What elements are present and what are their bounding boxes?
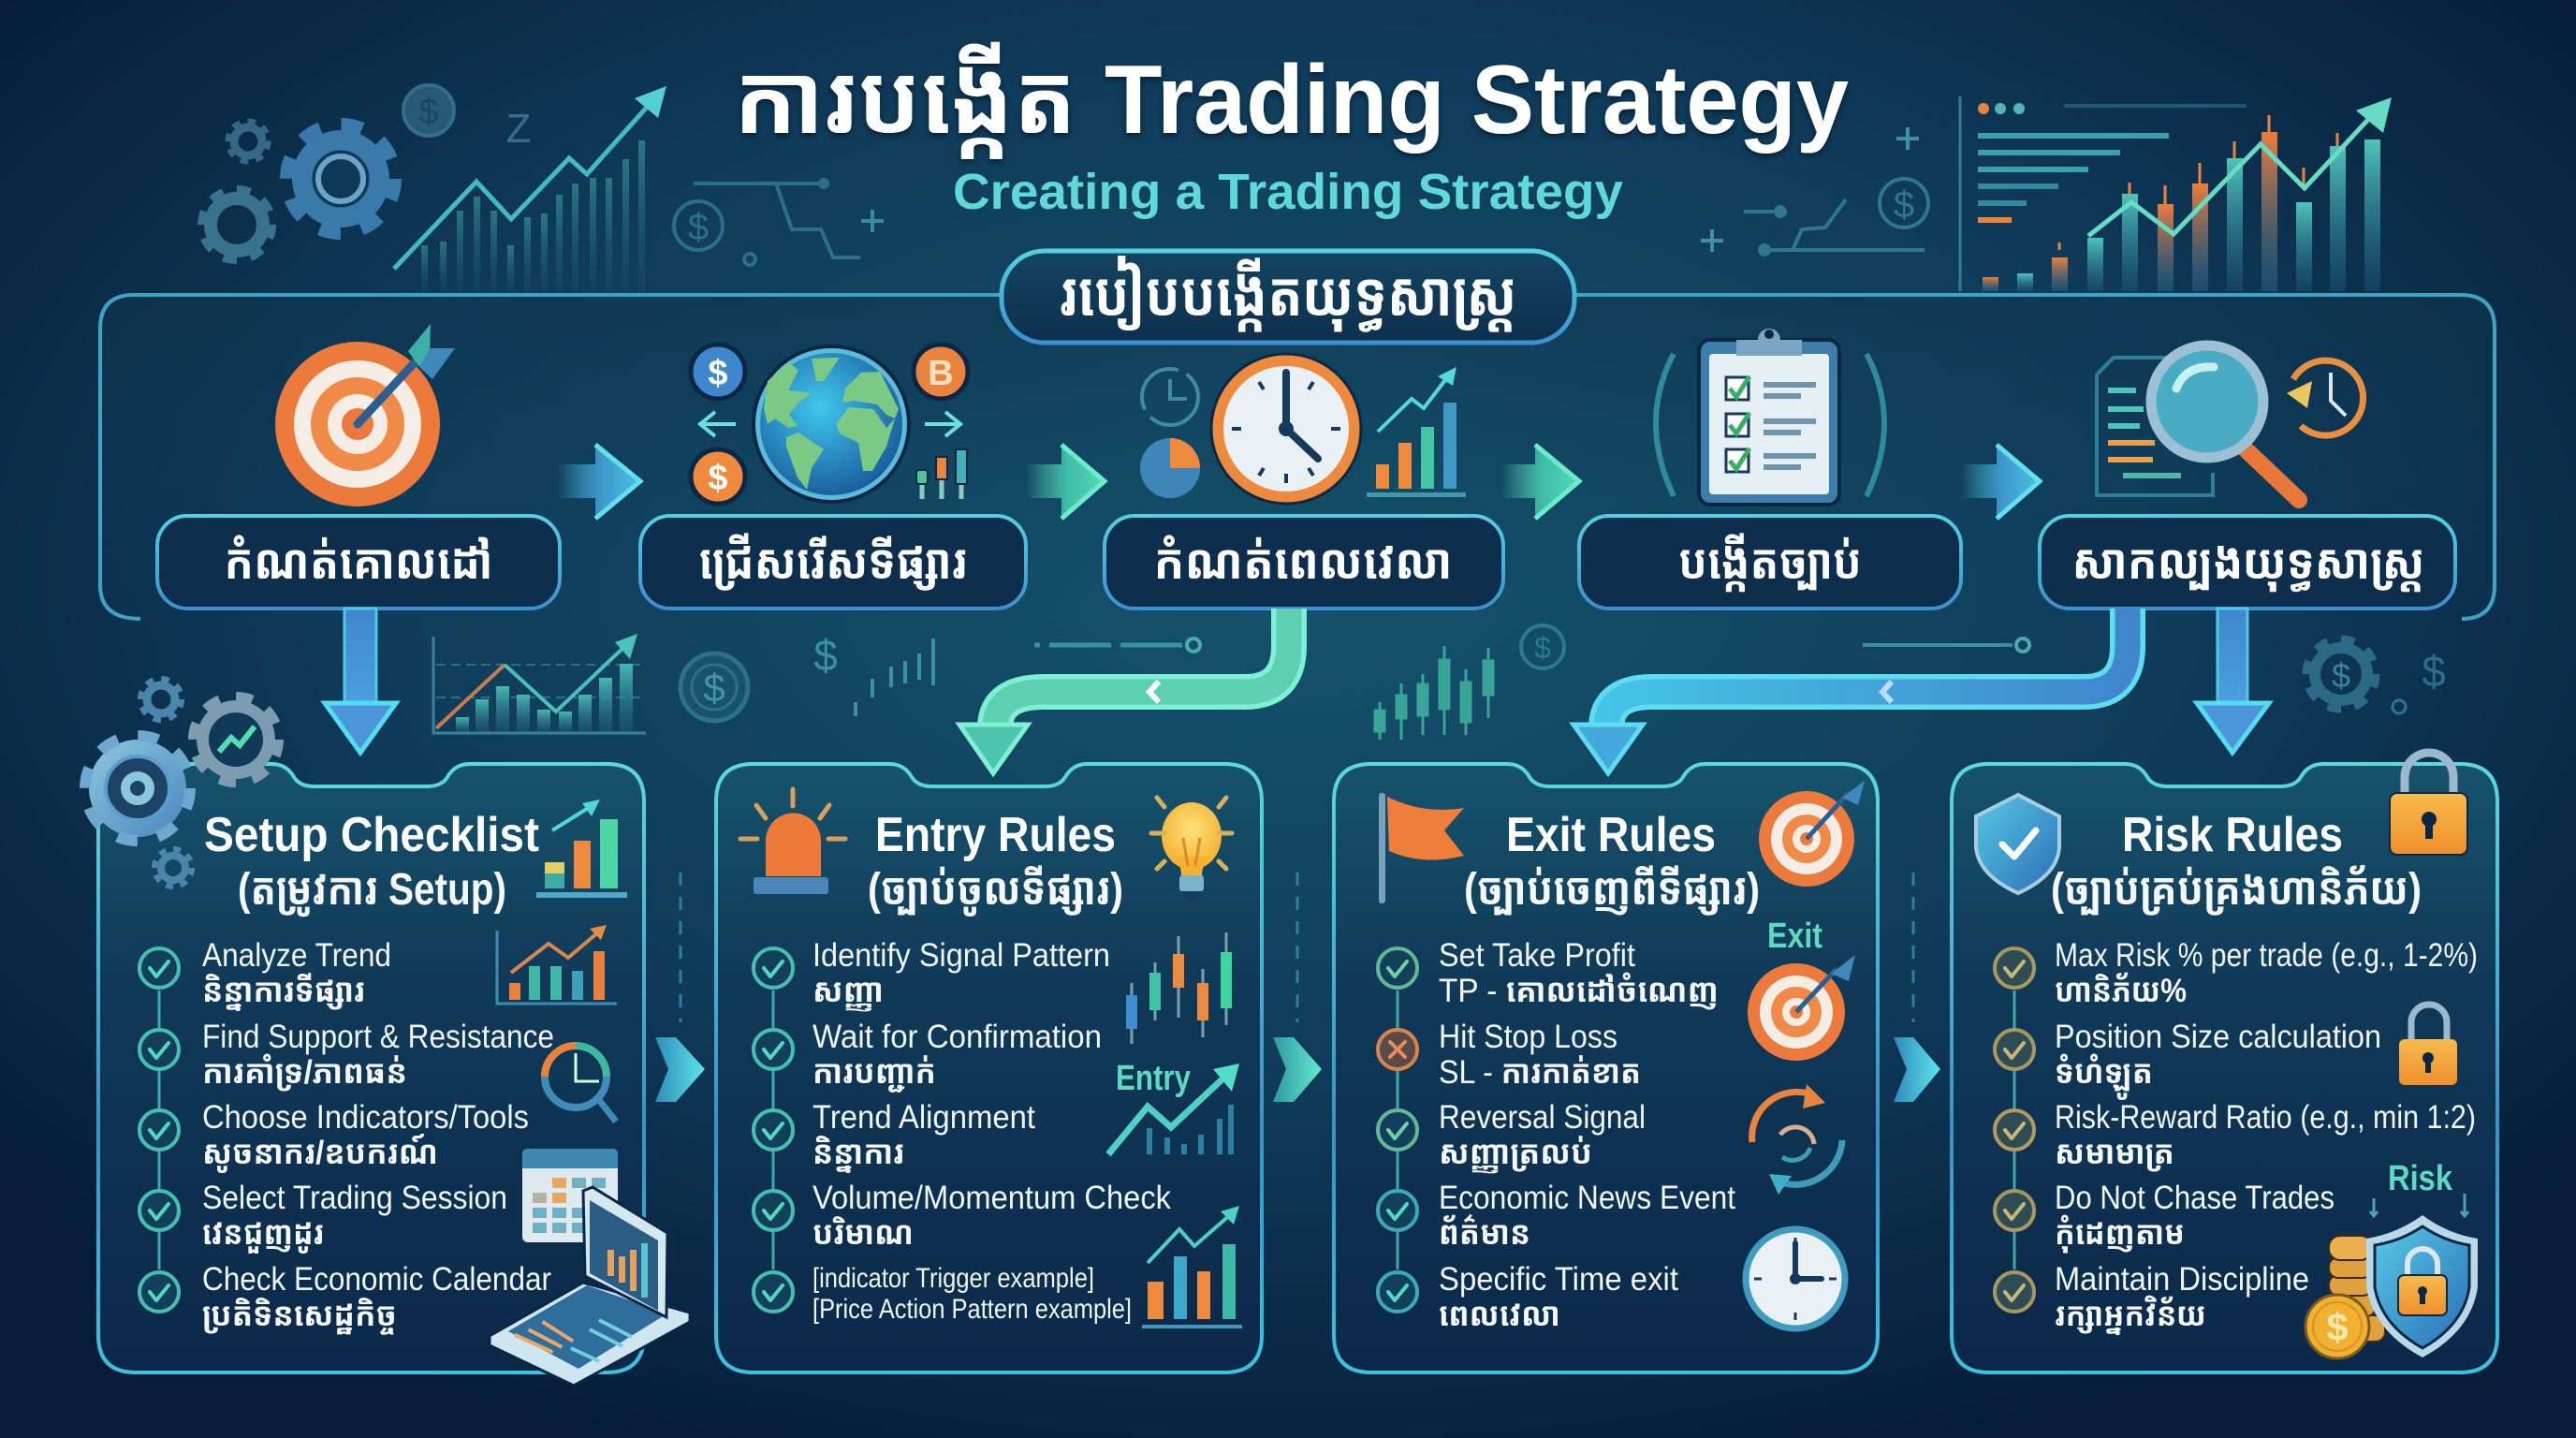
item: reversal: សញ្ញាត្រលប់ bbox=[1439, 1135, 1592, 1174]
arrow: step 3 to 4 bbox=[1501, 445, 1579, 519]
card subheading: (ច្បាប់ចូលទីផ្សារ) bbox=[868, 864, 1123, 917]
card subheading: (ច្បាប់គ្រប់គ្រងហានិភ័យ) bbox=[2051, 864, 2422, 916]
decoration: top-left gears and growth chart bbox=[202, 85, 884, 292]
icon: dollar gear bbox=[2306, 639, 2376, 709]
icon: tablet and laptop bbox=[490, 1187, 690, 1386]
icon: shield bbox=[1976, 795, 2059, 893]
item: calendar bbox=[139, 1261, 551, 1335]
item: confirmation: ការបញ្ជាក់ bbox=[812, 1054, 936, 1093]
subtitle: Creating a Trading Strategy bbox=[953, 164, 1623, 220]
item: session bbox=[139, 1180, 507, 1254]
icon: large gear bbox=[85, 736, 190, 841]
decoration: middle-right candles and coins bbox=[1374, 625, 2446, 740]
step label: choose market bbox=[640, 516, 1026, 609]
panel: risk rules bbox=[1952, 753, 2497, 1372]
item: indicators bbox=[139, 1099, 529, 1173]
item: news: ព័ត៌មាន bbox=[1439, 1212, 1530, 1252]
item: confirmation bbox=[754, 1019, 1102, 1093]
item: signal pattern: សញ្ញា bbox=[812, 973, 884, 1012]
panel: exit rules bbox=[1334, 764, 1878, 1372]
card frame bbox=[1952, 764, 2497, 1372]
icon: magnifier over document bbox=[2097, 345, 2364, 500]
item: do not chase bbox=[1995, 1180, 2334, 1254]
arrow: exit to risk bbox=[1894, 1037, 1940, 1102]
icon: gold coin: $ bbox=[2326, 1305, 2349, 1349]
icon: small gear bbox=[228, 122, 268, 161]
item: signal pattern bbox=[754, 937, 1110, 1012]
checklist rail bbox=[2012, 990, 2016, 1269]
item: confirmation: Wait for Confirmation bbox=[812, 1019, 1102, 1055]
icon: large gear bbox=[286, 125, 395, 233]
item: max risk bbox=[1995, 937, 2478, 1009]
item: trend alignment: និន្នាការ bbox=[812, 1134, 904, 1174]
item: discipline: Maintain Discipline bbox=[2055, 1261, 2309, 1298]
item: session: Select Trading Session bbox=[202, 1180, 507, 1216]
item: discipline: រក្សាអ្នកវិន័យ bbox=[2055, 1296, 2206, 1336]
item: analyze trend: និន្នាការទីផ្សារ bbox=[202, 972, 365, 1012]
icon: dollar gear: $ bbox=[2332, 656, 2350, 695]
checklist rail bbox=[157, 990, 161, 1269]
decoration: middle-left mini chart bbox=[433, 631, 1200, 733]
dashboard lines bbox=[1960, 96, 2247, 291]
item: risk reward bbox=[1995, 1099, 2476, 1172]
icon: clock bbox=[1746, 1229, 1845, 1328]
connector dashes between cards bbox=[681, 873, 1913, 1022]
icon: coin: $ bbox=[1534, 631, 1551, 665]
item: signal pattern: Identify Signal Pattern bbox=[812, 937, 1110, 974]
decoration: top-right dashboard chart bbox=[1701, 96, 2392, 291]
panel: entry rules bbox=[716, 764, 1262, 1372]
decoration: coin and circuit bbox=[674, 180, 884, 265]
panel: strategy process bbox=[100, 251, 2495, 619]
icon: trend chart bbox=[497, 925, 617, 1004]
panel: setup checklist bbox=[85, 679, 690, 1386]
arrow: test strategy to risk rules bbox=[2197, 609, 2269, 753]
icon: calendar bbox=[522, 1149, 618, 1242]
icon: gear with trend bbox=[193, 697, 279, 783]
item: indicators: Choose Indicators/Tools bbox=[202, 1099, 529, 1136]
step label: define goal bbox=[157, 516, 560, 609]
tag: exit: Exit bbox=[1767, 917, 1822, 956]
icon: dollar coin bbox=[403, 85, 454, 136]
icon: candlesticks bbox=[1126, 932, 1232, 1044]
small dollar: $ bbox=[813, 631, 838, 680]
item: position size: Position Size calculation bbox=[2055, 1019, 2381, 1055]
item: analyze trend: Analyze Trend bbox=[202, 937, 391, 974]
letter mark: Z bbox=[506, 106, 531, 152]
arrow: rising trend bbox=[394, 86, 666, 269]
arrow: test strategy to exit rules bbox=[1573, 609, 2128, 773]
arrow: entry to exit bbox=[1273, 1037, 1322, 1102]
item: stop loss: SL - ការកាត់ខាត bbox=[1439, 1054, 1641, 1091]
step label: create rules bbox=[1579, 516, 1961, 609]
small ring bbox=[2393, 700, 2406, 713]
icon: gold coin bbox=[2305, 1295, 2369, 1358]
small bars bbox=[854, 638, 935, 716]
icon: small gear bbox=[154, 849, 192, 887]
panel frame bbox=[100, 295, 2495, 619]
item: discipline bbox=[1995, 1261, 2309, 1336]
item: take profit: TP - គោលដៅចំណេញ bbox=[1439, 971, 1719, 1010]
step label: define goal: កំណត់គោលដៅ bbox=[225, 535, 492, 590]
heading pill: របៀបបង្កើតយុទ្ធសាស្ត្រ bbox=[1060, 256, 1516, 333]
item: position size: ទំហំឡូត bbox=[2055, 1052, 2153, 1100]
item: time exit: ពេលវេលា bbox=[1439, 1297, 1560, 1333]
icon: dollar coin: $ bbox=[418, 93, 439, 132]
heading pill bbox=[1002, 251, 1574, 343]
arrow: step 2 to 3 bbox=[1026, 445, 1105, 519]
item: stop loss bbox=[1378, 1019, 1641, 1091]
card subheading: (តម្រូវការ Setup) bbox=[238, 865, 506, 917]
item: volume momentum bbox=[754, 1180, 1171, 1252]
title: English part: Trading Strategy bbox=[1105, 46, 1849, 154]
icon: clock with pie and bars bbox=[1140, 354, 1466, 504]
item: risk reward: សមាមាត្រ bbox=[2055, 1135, 2174, 1172]
icon: dollar coin bbox=[681, 653, 748, 721]
item: take profit bbox=[1378, 937, 1719, 1010]
icon: checklist clipboard bbox=[1656, 329, 1884, 505]
checklist bbox=[139, 937, 554, 1335]
tag: entry: Entry bbox=[1116, 1059, 1191, 1098]
item: trigger examples bbox=[754, 1263, 1132, 1325]
item: time exit bbox=[1378, 1261, 1678, 1333]
checklist rail bbox=[1397, 990, 1398, 1269]
icon: bar chart bbox=[536, 800, 627, 898]
tag: risk: Risk bbox=[2388, 1159, 2453, 1198]
item: time exit: Specific Time exit bbox=[1439, 1261, 1678, 1298]
card heading: Setup Checklist bbox=[204, 808, 539, 862]
icon: target middle bbox=[1748, 955, 1855, 1061]
decoration: coin and circuit: $ bbox=[1894, 184, 1914, 226]
icon: small down arrows bbox=[2370, 1194, 2468, 1216]
icon: clock magnifier bbox=[545, 1046, 616, 1122]
step label: test strategy bbox=[2040, 516, 2455, 609]
icon: small gear top bbox=[140, 679, 182, 720]
item: analyze trend bbox=[139, 937, 391, 1012]
icon: reversal arrows bbox=[1752, 1084, 1842, 1195]
circuit line bbox=[1863, 638, 2029, 652]
decoration: coin and circuit: $ bbox=[688, 207, 709, 248]
fading bars bbox=[421, 140, 645, 292]
item: calendar: ប្រតិទិនសេដ្ឋកិច្ច bbox=[202, 1296, 397, 1335]
icon: dollar coin: $ bbox=[703, 666, 725, 710]
icon: bottom bar chart bbox=[1142, 1206, 1242, 1328]
panel top highlight bbox=[655, 292, 1919, 298]
item: max risk: ហានិភ័យ% bbox=[2055, 972, 2187, 1009]
title: Khmer part: ការបង្កើត bbox=[734, 41, 1076, 160]
item: session: វេនជួញដូរ bbox=[202, 1215, 324, 1254]
step label: define timeframe bbox=[1105, 516, 1503, 609]
item: trend alignment: Trend Alignment bbox=[812, 1099, 1035, 1136]
item: reversal bbox=[1378, 1099, 1646, 1174]
decoration: coin and circuit bbox=[1701, 127, 1928, 255]
icon: target top bbox=[1759, 781, 1865, 887]
icon: alarm light bbox=[740, 789, 845, 894]
item: trigger examples: [Price Action Pattern example] bbox=[812, 1294, 1132, 1325]
item: calendar: Check Economic Calendar bbox=[202, 1261, 551, 1298]
checklist bbox=[754, 937, 1171, 1325]
checklist rail bbox=[771, 990, 775, 1269]
item: support and resistance bbox=[139, 1019, 554, 1092]
circuit line bbox=[1034, 638, 1200, 652]
icon: shield with lock bbox=[2366, 1215, 2478, 1357]
card heading: Entry Rules bbox=[875, 808, 1116, 862]
item: position size bbox=[1995, 1019, 2381, 1100]
icon: coin stack bbox=[2329, 1236, 2385, 1342]
item: news: Economic News Event bbox=[1439, 1180, 1735, 1216]
icon: entry trend bbox=[1108, 1064, 1239, 1154]
item: max risk: Max Risk % per trade (e.g., 1-2%) bbox=[2055, 937, 2478, 974]
mini chart bbox=[433, 634, 646, 733]
item: stop loss: Hit Stop Loss bbox=[1439, 1019, 1617, 1055]
item: trend alignment bbox=[754, 1099, 1035, 1174]
item: volume momentum: Volume/Momentum Check bbox=[812, 1180, 1171, 1216]
card heading: Risk Rules bbox=[2122, 808, 2343, 862]
icon: target with arrow bbox=[275, 324, 455, 506]
item: do not chase: Do Not Chase Trades bbox=[2055, 1180, 2334, 1216]
icon: globe with currencies: $ bbox=[708, 354, 728, 393]
arrow: setup to entry bbox=[655, 1037, 705, 1102]
bar chart bbox=[1983, 115, 2380, 291]
checklist bbox=[1378, 937, 1735, 1333]
arrow: step 4 to 5 bbox=[1961, 445, 2040, 519]
step label: create rules: បង្កើតច្បាប់ bbox=[1678, 532, 1862, 592]
arrow: goal to setup checklist bbox=[325, 609, 396, 753]
checklist bbox=[1995, 937, 2478, 1336]
icon: padlock middle bbox=[2399, 1005, 2457, 1085]
icon: globe with currencies bbox=[691, 345, 968, 504]
title bbox=[734, 41, 1849, 160]
arrow: timeframe to entry rules bbox=[959, 609, 1289, 773]
step label: test strategy: សាកល្បងយុទ្ធសាស្ត្រ bbox=[2072, 536, 2424, 592]
item: risk reward: Risk-Reward Ratio (e.g., min 1:2) bbox=[2055, 1099, 2476, 1136]
card subheading: (ច្បាប់ចេញពីទីផ្សារ) bbox=[1464, 864, 1760, 916]
small dollar: $ bbox=[2422, 647, 2446, 696]
step label: define timeframe: កំណត់ពេលវេលា bbox=[1153, 535, 1453, 590]
card frame bbox=[1334, 764, 1878, 1372]
card frame bbox=[98, 764, 644, 1372]
item: support and resistance: ការគាំទ្រ/ភាពធន់ bbox=[202, 1052, 407, 1092]
item: take profit: Set Take Profit bbox=[1439, 937, 1635, 974]
icon: globe with currencies: B bbox=[928, 354, 954, 393]
item: indicators: សូចនាករ/ឧបករណ៍ bbox=[202, 1132, 438, 1173]
item: do not chase: កុំដេញតាម bbox=[2055, 1213, 2185, 1254]
item: news bbox=[1378, 1180, 1735, 1252]
icon: medium gear bbox=[202, 190, 271, 259]
arrow: rising trend bbox=[2088, 97, 2392, 236]
card frame bbox=[716, 764, 1262, 1372]
step label: choose market: ជ្រើសរើសទីផ្សារ bbox=[698, 532, 968, 591]
card heading: Exit Rules bbox=[1506, 808, 1716, 862]
icon: light bulb bbox=[1151, 798, 1232, 902]
item: trigger examples: [indicator Trigger example] bbox=[812, 1263, 1094, 1294]
icon: padlock top bbox=[2390, 753, 2467, 855]
item: volume momentum: បរិមាណ bbox=[812, 1215, 914, 1252]
item: support and resistance: Find Support & Resistance bbox=[202, 1019, 554, 1055]
arrow: step 1 to 2 bbox=[558, 445, 640, 519]
icon: coin bbox=[1521, 625, 1564, 668]
candlestick chart bbox=[1374, 646, 1494, 740]
icon: globe with currencies: $ bbox=[708, 459, 728, 498]
icon: flag bbox=[1379, 793, 1464, 903]
item: reversal: Reversal Signal bbox=[1439, 1099, 1646, 1136]
